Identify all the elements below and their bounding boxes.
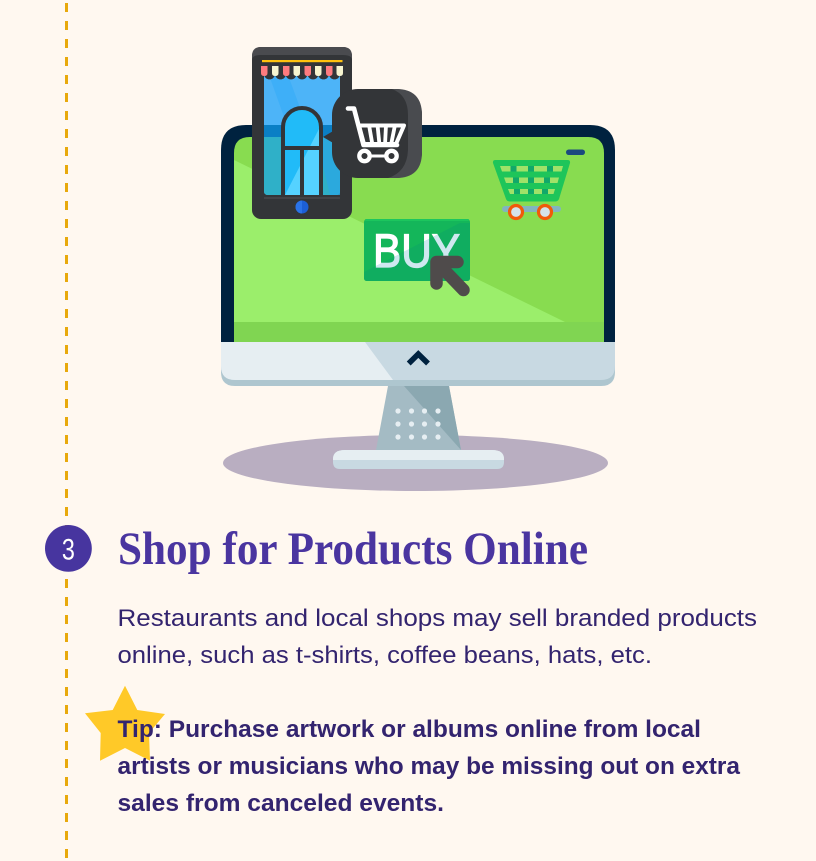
monitor frame: [221, 125, 615, 344]
illustration: computer with online shop: [221, 47, 615, 491]
tip text: sales from canceled events.: [118, 790, 444, 817]
monitor shadow: [223, 435, 608, 491]
monitor screen: [234, 137, 604, 342]
step number badge: [45, 525, 92, 572]
monitor stand: [376, 386, 461, 450]
phone with shop front: [252, 47, 352, 219]
tip text: artists or musicians who may be missing out on extra: [118, 753, 740, 780]
icon: white cart: [348, 108, 404, 161]
icon: cursor arrow: [436, 262, 464, 290]
body paragraph: online, such as t-shirts, coffee beans, hats, etc.: [118, 642, 652, 669]
buy button: BUY: [373, 225, 460, 278]
phone awning: [261, 60, 343, 79]
monitor chin: [221, 342, 615, 386]
icon: green shopping cart: [493, 160, 570, 218]
phone door: [283, 108, 321, 195]
cart speech bubble: [323, 89, 422, 178]
monitor base: [333, 450, 504, 469]
dashed timeline: [65, 3, 68, 861]
body paragraph: Restaurants and local shops may sell branded products: [118, 605, 757, 632]
heading: Shop for Products Online: [118, 524, 588, 575]
tip text: Tip: Purchase artwork or albums online from local: [118, 716, 701, 743]
step number badge: 3: [62, 534, 75, 566]
icon: star: [85, 686, 165, 761]
